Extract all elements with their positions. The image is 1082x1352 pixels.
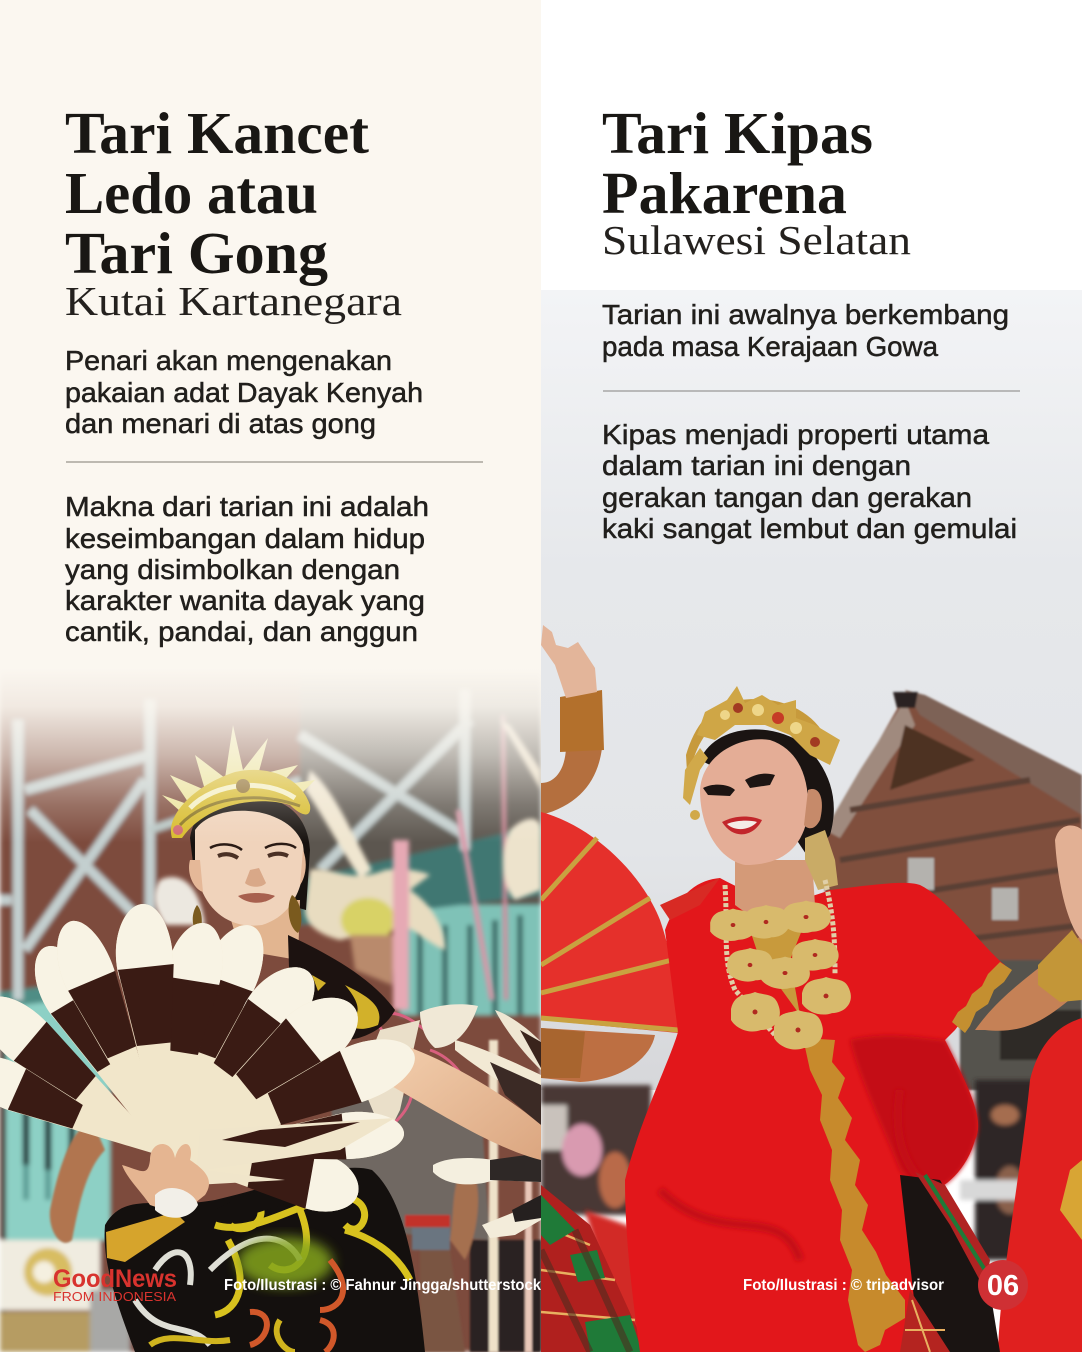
logo: GoodNews from Indonesia: FROM INDONESIA [53, 1289, 176, 1304]
text block: origin of the dance: pada masa Kerajaan Gowa [602, 331, 938, 362]
dancer crown [162, 725, 315, 838]
text block: costume description: Penari akan mengenakan [65, 345, 392, 376]
dancer face [189, 811, 306, 933]
subtitle: Kutai Kartanegara: Kutai Kartanegara [65, 278, 402, 324]
dancer right arm [394, 1048, 541, 1160]
logo: GoodNews from Indonesia: GoodNews [53, 1265, 177, 1293]
neck [735, 860, 815, 912]
gold dress trim [803, 1038, 905, 1352]
logo: GoodNews from Indonesia [53, 1265, 177, 1304]
gold disc necklace [710, 880, 851, 1050]
dancer neck [232, 900, 300, 958]
fade to cream [0, 668, 541, 843]
red dress [625, 878, 1005, 1352]
background crowd [541, 1080, 1035, 1260]
photo: Kipas Pakarena dancer in red [541, 625, 1082, 1352]
red fan [541, 812, 678, 1033]
text block: meaning of the dance: Makna dari tarian ini adalah [65, 491, 429, 522]
text block: fan as the main prop: Kipas menjadi properti utama [602, 419, 989, 450]
panel: left background [0, 0, 541, 670]
earring [805, 830, 838, 890]
person at right edge in red [998, 1018, 1082, 1352]
background man's arm [50, 1120, 105, 1243]
text block: costume description: dan menari di atas gong [65, 408, 376, 439]
gray-shirted figure at right [330, 1040, 541, 1352]
dancer left arm under fan [541, 1028, 655, 1082]
text block: costume description: pakaian adat Dayak Kenyah [65, 377, 423, 408]
text block: meaning of the dance: cantik, pandai, dan anggun [65, 616, 418, 647]
title: Tari Kipas Pakarena: Tari Kipas [602, 100, 873, 166]
text block: origin of the dance: Tarian ini awalnya berkembang [602, 299, 1009, 330]
dancer hair [700, 729, 834, 860]
title: Tari Kancet Ledo atau Tari Gong: Ledo atau [65, 160, 318, 226]
text block: meaning of the dance [65, 491, 429, 647]
text block: fan as the main prop: dalam tarian ini dengan [602, 450, 911, 481]
right-hand feathers [420, 1004, 541, 1238]
dancer face [700, 739, 822, 865]
text block: meaning of the dance: keseimbangan dalam hidup [65, 523, 425, 554]
text block: costume description [65, 345, 423, 439]
page number badge: 06 [987, 1270, 1019, 1302]
dancer hand [122, 1144, 209, 1218]
panel: right background [541, 0, 1082, 290]
dancer hair behind head [190, 797, 310, 910]
background dancer with feather headdress [155, 715, 541, 1010]
text block: meaning of the dance: yang disimbolkan dengan [65, 554, 400, 585]
title: Tari Kipas Pakarena: Pakarena [602, 160, 847, 226]
text block: fan as the main prop: gerakan tangan dan gerakan [602, 482, 972, 513]
pink ribbons [378, 1012, 461, 1122]
raised arm of dancer behind [541, 625, 604, 815]
building backdrop [0, 668, 541, 1352]
text block: meaning of the dance: karakter wanita dayak yang [65, 585, 425, 616]
dancer black blouse shoulder [288, 935, 395, 1040]
dancer crown [683, 686, 840, 820]
wooden house [825, 690, 1082, 1090]
dancer skirt [105, 1158, 425, 1352]
text block: origin of the dance [602, 299, 1009, 362]
red sleeves in background crowd [582, 1208, 637, 1328]
plaid skirt, lower left [541, 1185, 648, 1352]
page number badge [978, 1260, 1028, 1310]
subtitle: Sulawesi Selatan: Sulawesi Selatan [602, 217, 911, 263]
title: Tari Kancet Ledo atau Tari Gong [65, 100, 369, 286]
text block: fan as the main prop [602, 419, 1017, 544]
panel: sky background [541, 290, 1082, 1090]
feather fan [0, 901, 424, 1217]
text block: fan as the main prop: kaki sangat lembut dan gemulai [602, 513, 1017, 544]
gold sleeve trim [952, 962, 1012, 1033]
photo: Kancet Ledo dancer with feather fan [0, 668, 541, 1352]
dancer right arm and hand [975, 826, 1082, 1031]
title: Tari Kancet Ledo atau Tari Gong: Tari Gong [65, 220, 328, 286]
title: Tari Kancet Ledo atau Tari Gong: Tari Kancet [65, 100, 369, 166]
dancer plaid skirt right [900, 1172, 1000, 1352]
title: Tari Kipas Pakarena [602, 100, 873, 226]
photo credit left: Foto/Ilustrasi : © Fahnur Jingga/shutterstock [224, 1277, 541, 1294]
photo credit right: Foto/Ilustrasi : © tripadvisor [743, 1277, 944, 1294]
